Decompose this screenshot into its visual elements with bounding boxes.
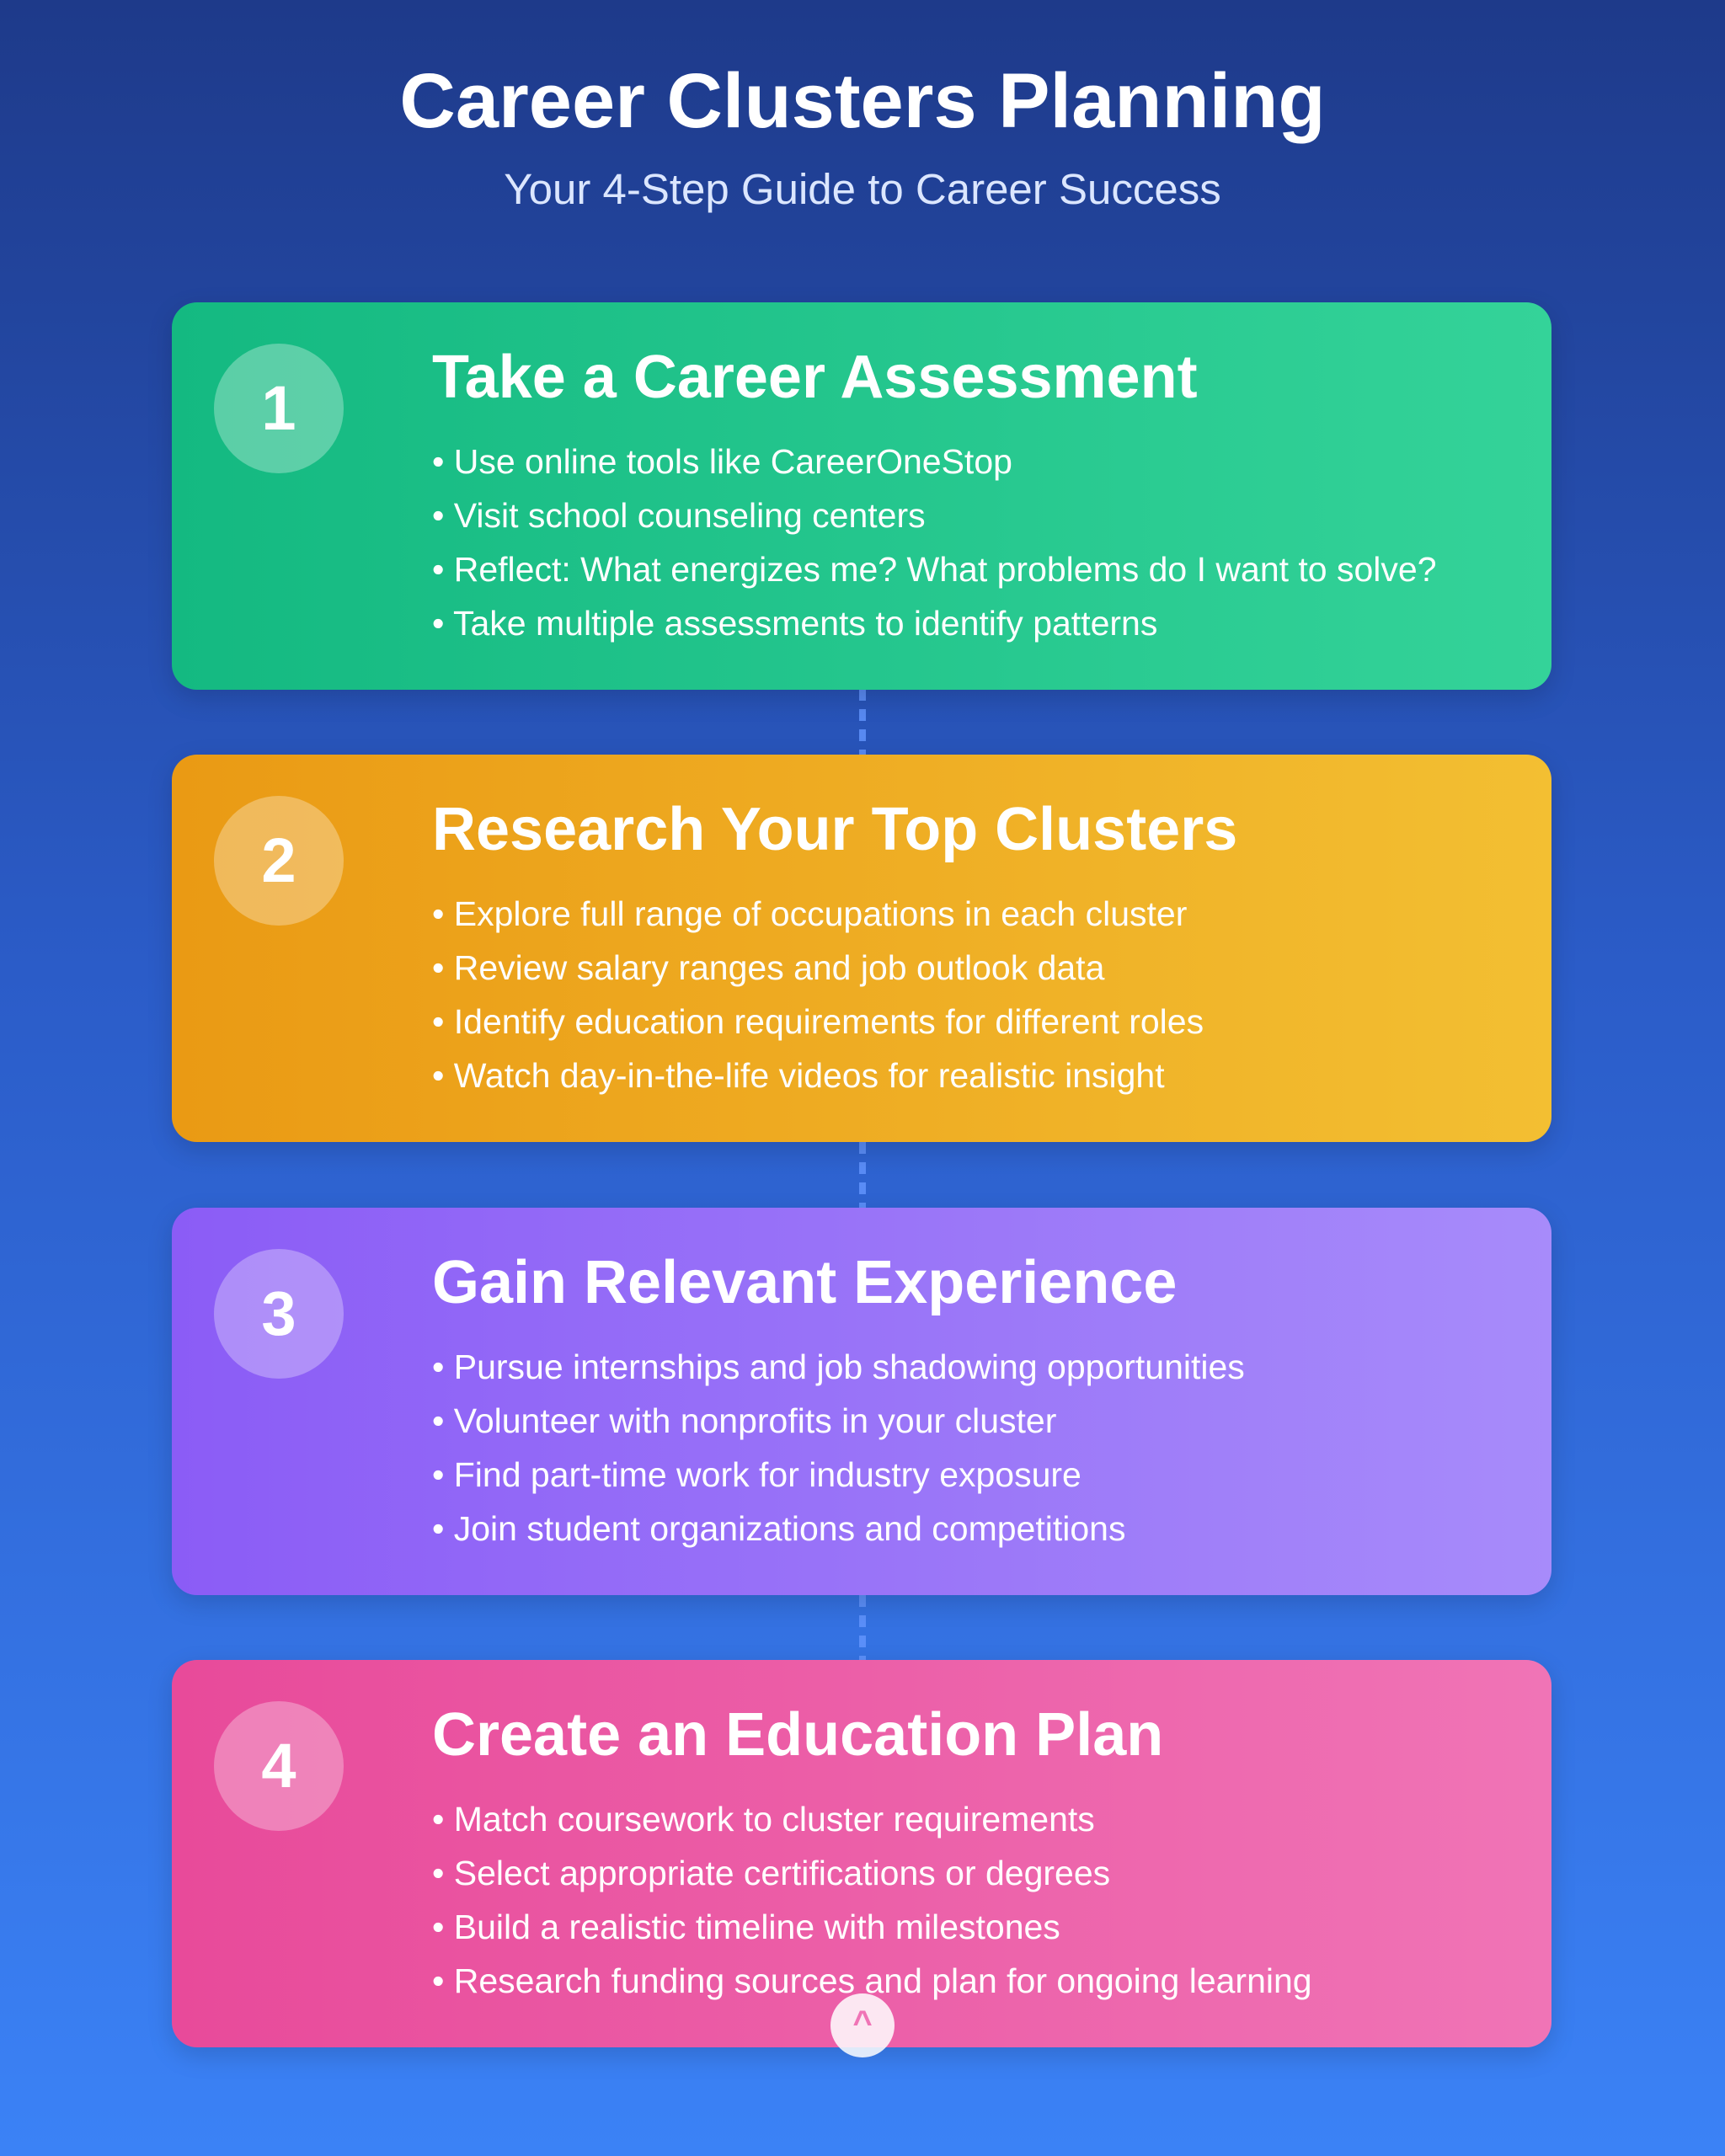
text block: step 3 bullets: • Find part-time work for industry exposure [432, 1455, 1081, 1494]
text block: step 1 bullets: • Reflect: What energizes me? What problems do I want to solve? [432, 550, 1437, 589]
icon: number 3: 3 [261, 1278, 296, 1348]
subtitle: Your 4-Step Guide to Career Success [504, 165, 1221, 213]
icon: number 1 [214, 344, 344, 473]
icon: number 2 [214, 796, 344, 926]
panel: step 4 [172, 1660, 1551, 2047]
panel: step 2 [172, 755, 1551, 1142]
heading: step 1: Take a Career Assessment [432, 344, 1198, 411]
text block: step 1 bullets: • Use online tools like CareerOneStop [432, 442, 1012, 481]
text block: step 3 bullets: • Pursue internships and job shadowing opportunities [432, 1348, 1245, 1386]
icon: number 1: 1 [261, 373, 296, 443]
text block: step 4 bullets: • Research funding sources and plan for ongoing learning [432, 1961, 1312, 2000]
icon: scroll-to-top button [830, 1993, 895, 2057]
icon: scroll-to-top button: ^ [852, 2004, 873, 2041]
heading: step 2: Research Your Top Clusters [432, 796, 1237, 863]
title: Career Clusters Planning [399, 58, 1326, 144]
text block: step 4 bullets: • Build a realistic timeline with milestones [432, 1908, 1060, 1946]
text block: step 1 bullets: • Take multiple assessments to identify patterns [432, 604, 1157, 643]
text block: step 3 bullets: • Volunteer with nonprofits in your cluster [432, 1401, 1056, 1440]
text block: step 1 bullets: • Visit school counseling centers [432, 496, 926, 535]
text block: step 2 bullets: • Watch day-in-the-life videos for realistic insight [432, 1056, 1165, 1095]
text block: step 2 bullets: • Identify education requirements for different roles [432, 1002, 1204, 1041]
icon: number 4: 4 [261, 1731, 296, 1801]
icon: number 4 [214, 1701, 344, 1831]
text block: step 3 bullets: • Join student organizations and competitions [432, 1509, 1125, 1548]
text block: step 4 bullets [432, 1800, 1312, 2000]
panel: step 3 [172, 1208, 1551, 1595]
text block: step 4 bullets: • Select appropriate certifications or degrees [432, 1854, 1110, 1892]
heading: step 4: Create an Education Plan [432, 1701, 1163, 1769]
heading: step 3: Gain Relevant Experience [432, 1249, 1177, 1316]
panel: step 1 [172, 302, 1551, 690]
icon: number 3 [214, 1249, 344, 1379]
text block: step 2 bullets [432, 894, 1204, 1095]
text block: step 1 bullets [432, 442, 1437, 643]
icon: number 2: 2 [261, 825, 296, 895]
text block: step 3 bullets [432, 1348, 1245, 1548]
text block: step 2 bullets: • Review salary ranges and job outlook data [432, 948, 1104, 987]
text block: step 4 bullets: • Match coursework to cluster requirements [432, 1800, 1095, 1838]
text block: step 2 bullets: • Explore full range of occupations in each cluster [432, 894, 1187, 933]
